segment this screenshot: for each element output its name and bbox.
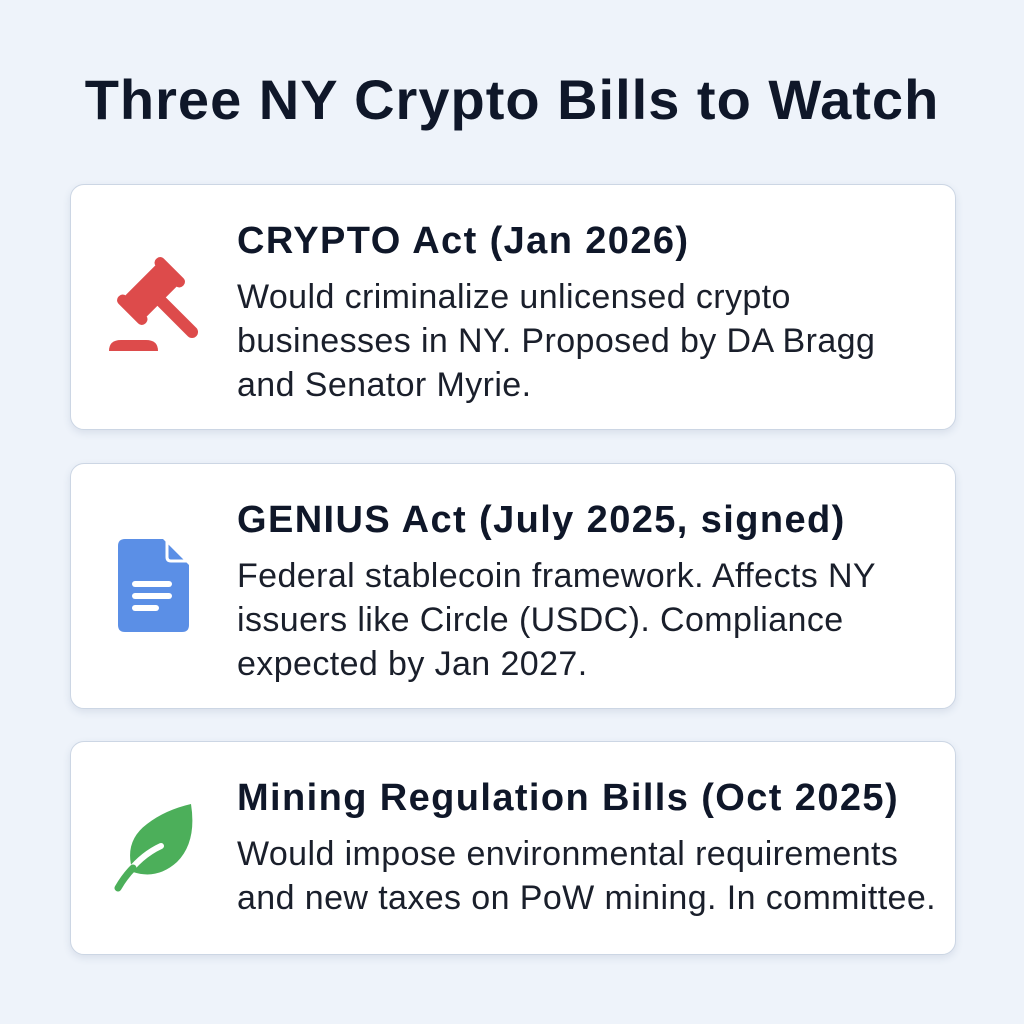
text: GENIUS Act: expected by Jan 2027. [237, 645, 588, 683]
text: CRYPTO Act: CRYPTO Act (Jan 2026) [237, 220, 689, 262]
text: Mining Regulation Bills [237, 777, 936, 917]
text: CRYPTO Act: Would criminalize unlicensed crypto [237, 278, 791, 316]
icon: gavel [109, 257, 198, 351]
text: Mining Regulation Bills: and new taxes on PoW mining. In committee. [237, 879, 936, 917]
text: CRYPTO Act: and Senator Myrie. [237, 366, 531, 404]
icon: document [118, 539, 189, 632]
text: GENIUS Act: GENIUS Act (July 2025, signed) [237, 499, 846, 541]
panel: GENIUS Act [70, 463, 956, 709]
text: GENIUS Act: issuers like Circle (USDC). Compliance [237, 601, 844, 639]
text: GENIUS Act: Federal stablecoin framework. Affects NY [237, 557, 876, 595]
title: Three NY Crypto Bills to Watch [85, 68, 939, 131]
text: Mining Regulation Bills: Mining Regulation Bills (Oct 2025) [237, 777, 899, 819]
text: CRYPTO Act [237, 220, 875, 404]
text: Mining Regulation Bills: Would impose environmental requirements [237, 835, 898, 873]
text: CRYPTO Act: businesses in NY. Proposed by DA Bragg [237, 322, 875, 360]
text: GENIUS Act [237, 499, 876, 683]
panel: Mining Regulation Bills [70, 741, 956, 955]
icon: leaf [114, 804, 192, 892]
panel: CRYPTO Act [70, 184, 956, 430]
